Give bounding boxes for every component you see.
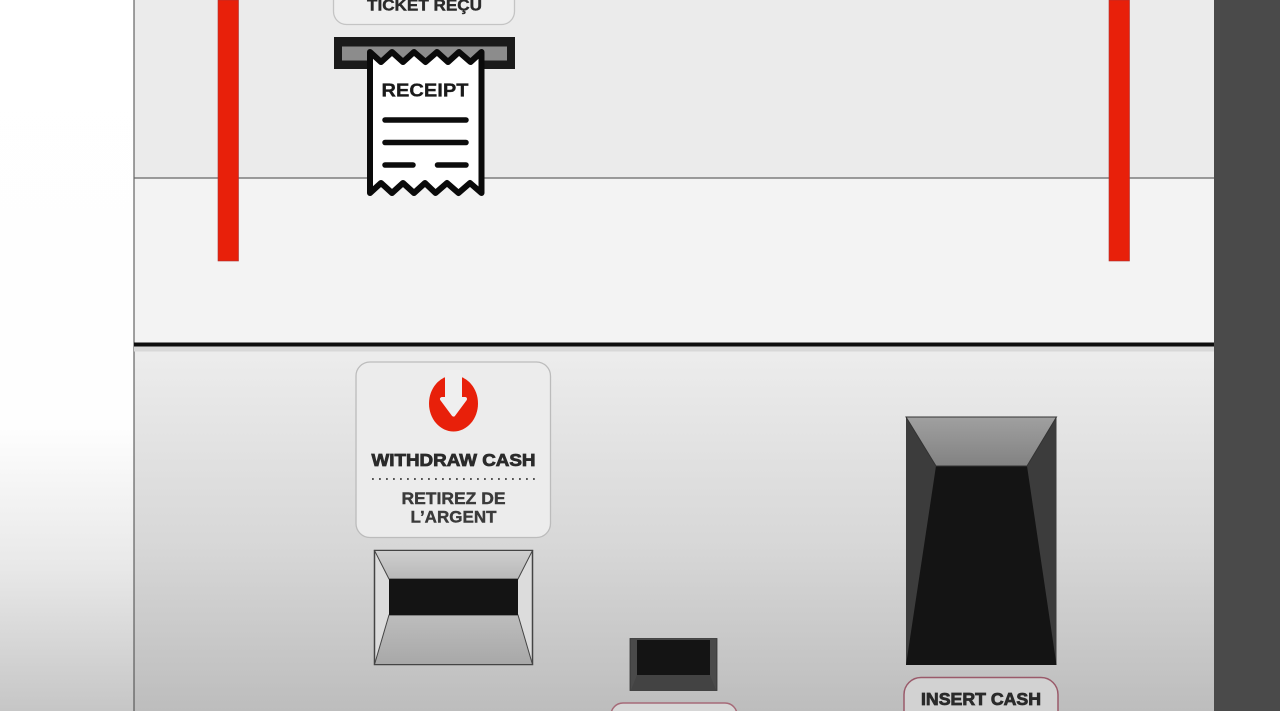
left red bar xyxy=(218,0,238,261)
receipt lines xyxy=(385,120,466,165)
small card slot xyxy=(630,638,717,690)
receipt xyxy=(370,52,482,193)
small slot label xyxy=(611,703,737,711)
icon: withdraw arrow xyxy=(429,372,478,432)
upper machine panel xyxy=(134,0,1214,178)
dark side panel xyxy=(1214,0,1280,711)
withdraw cash panel xyxy=(356,362,550,538)
ticket label xyxy=(334,0,514,24)
receipt slot xyxy=(334,37,515,69)
withdraw heading: WITHDRAW CASH xyxy=(372,450,536,470)
background left of machine xyxy=(0,0,134,711)
cash withdrawal slot xyxy=(374,550,532,664)
receipt heading: RECEIPT xyxy=(382,80,469,100)
insert cash label: INSERT CASH xyxy=(921,689,1041,709)
right red bar xyxy=(1109,0,1130,261)
insert cash label xyxy=(904,678,1058,711)
withdraw french text: RETIREZ DE xyxy=(402,489,506,508)
withdraw cash panel: L’ARGENT xyxy=(410,508,497,526)
insert cash slot xyxy=(906,417,1056,665)
ledge panel xyxy=(134,178,1214,344)
lower machine panel xyxy=(134,347,1214,711)
